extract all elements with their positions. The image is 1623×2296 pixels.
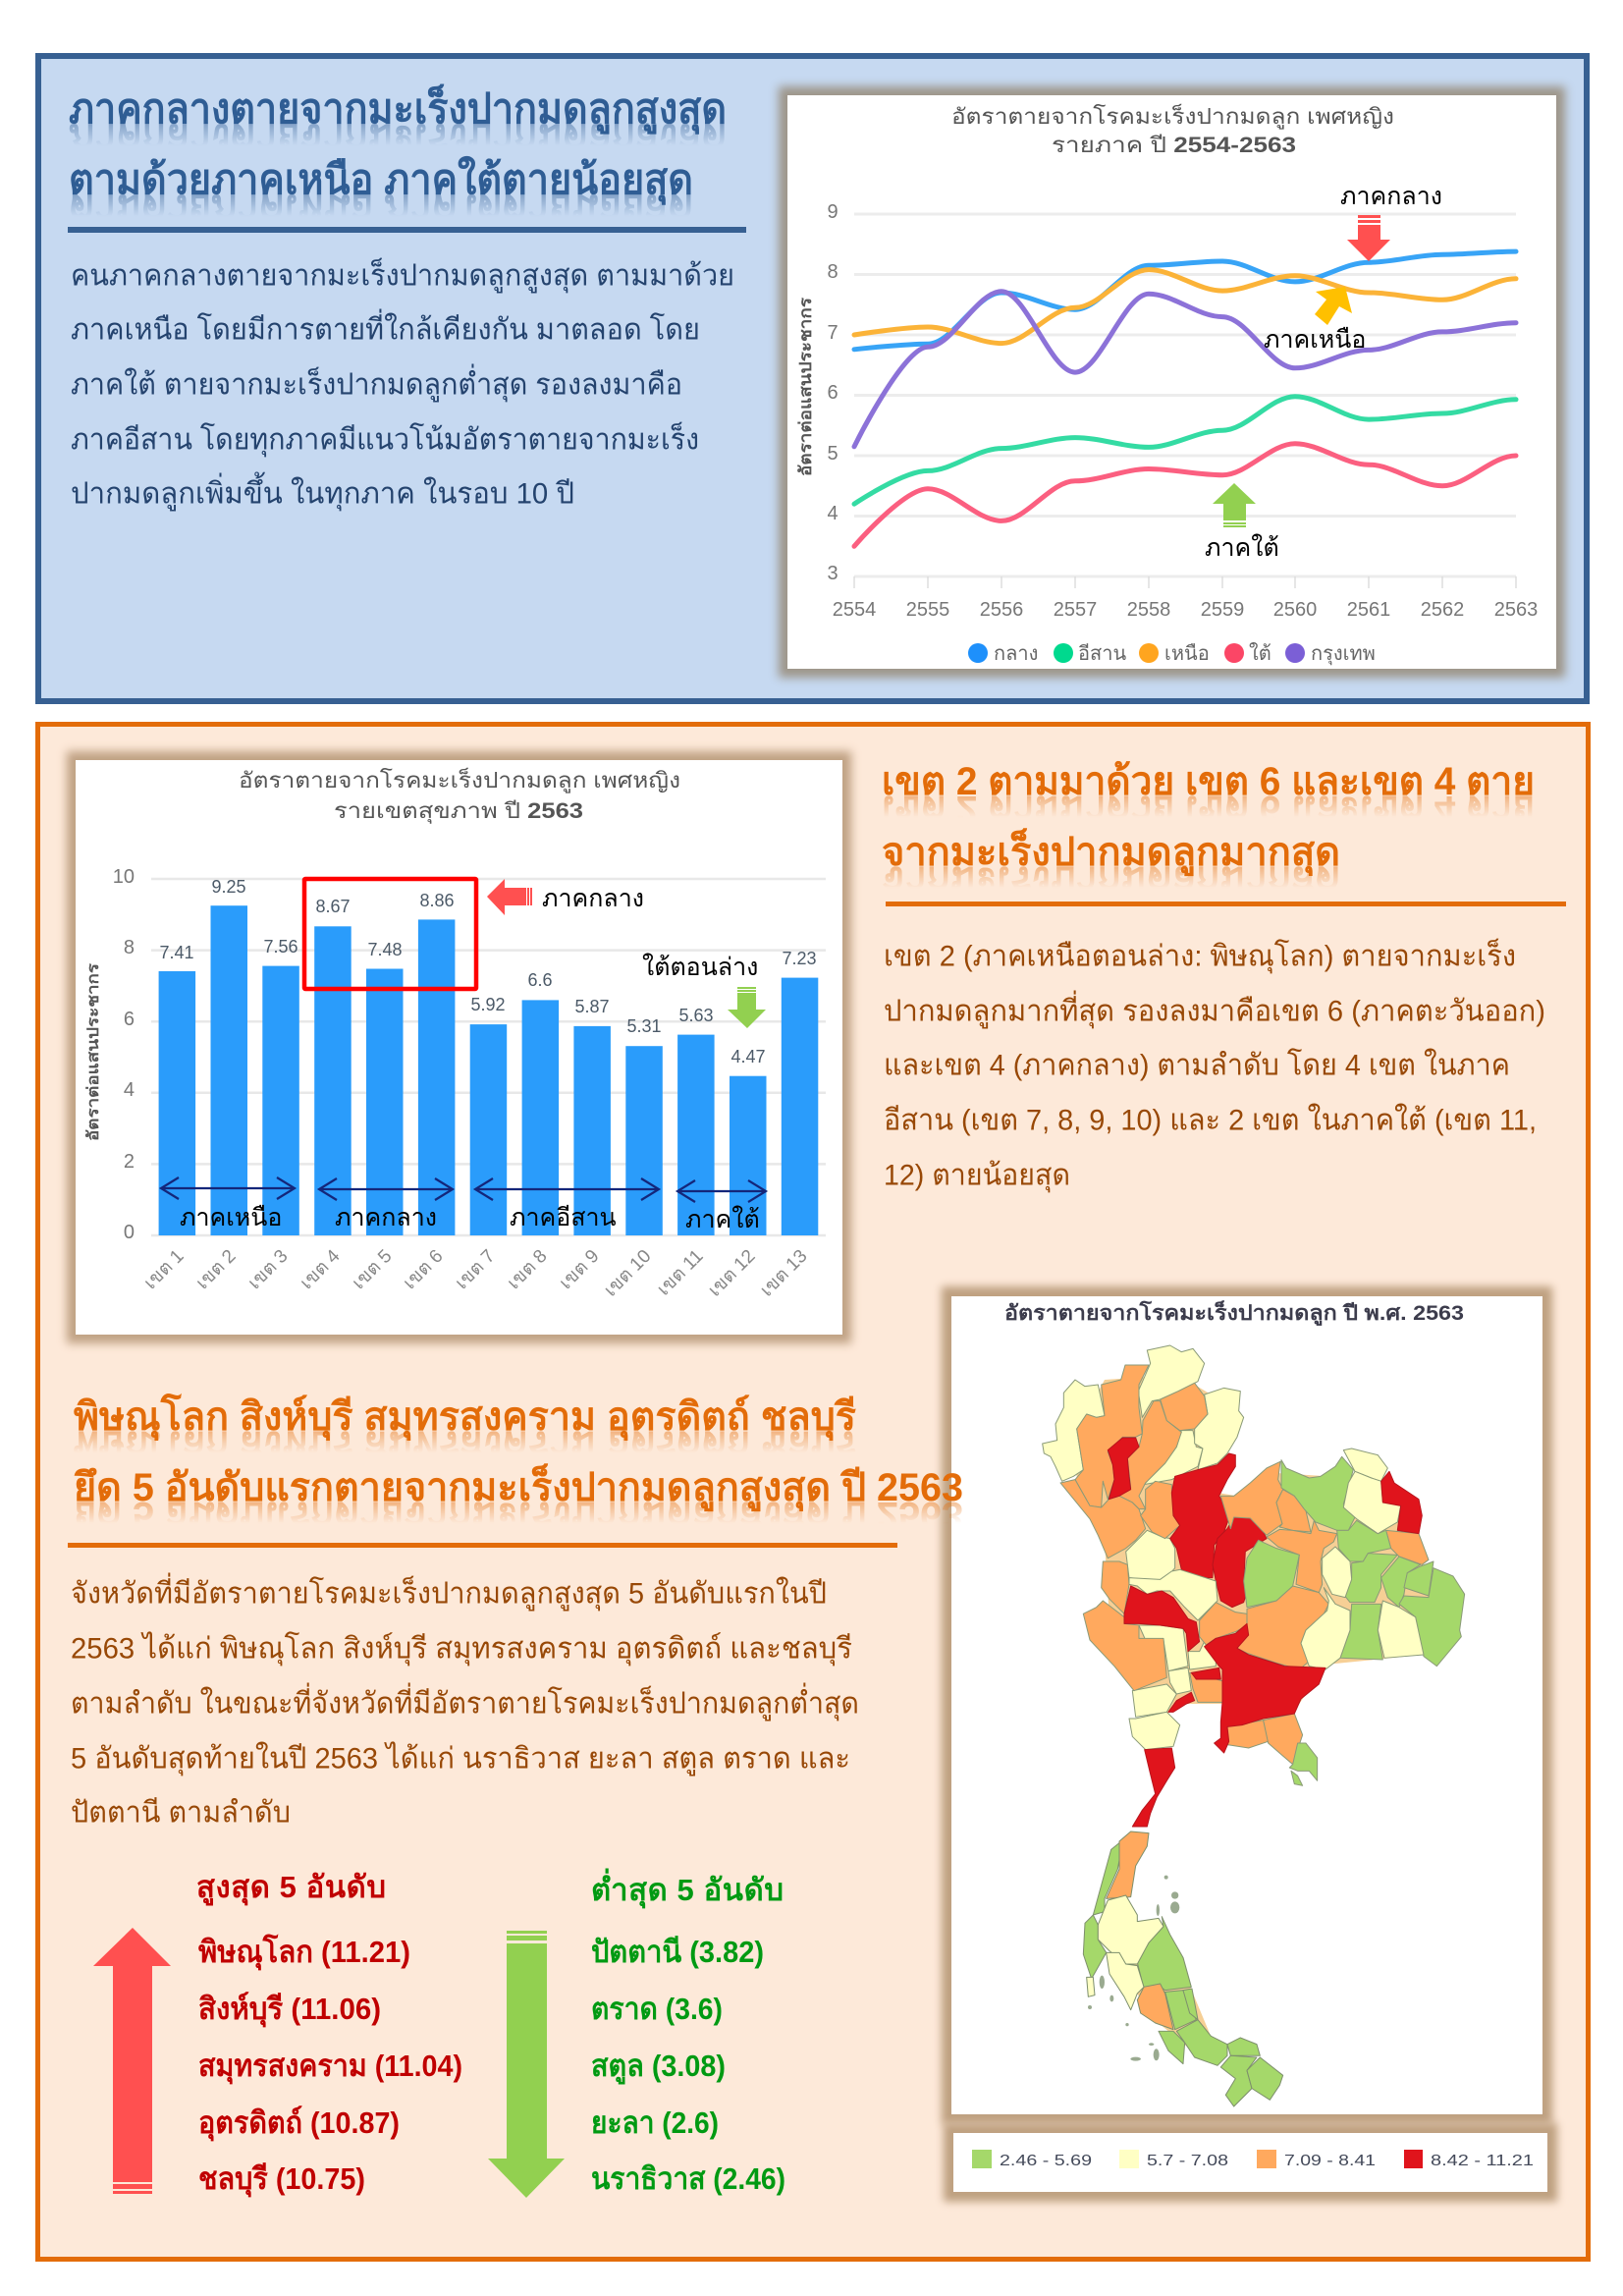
annotation: central region <box>1340 183 1442 261</box>
region arrow: south <box>677 1180 766 1233</box>
data labels: 6.6 <box>527 970 553 990</box>
legend: อีสาน <box>1078 643 1126 665</box>
x axis labels: 2560 <box>1273 599 1317 621</box>
heading rule: blue <box>68 227 746 233</box>
annotation: lower south: ใต้ตอนล่าง <box>642 953 758 981</box>
x axis labels: 2555 <box>906 599 949 621</box>
map legend: 8.42 - 11.21 <box>1431 2153 1534 2169</box>
x axis labels: เขต 6 <box>400 1246 448 1293</box>
card: map legend background <box>953 2133 1547 2192</box>
map legend: 2.46 - 5.69 <box>1000 2153 1092 2169</box>
y axis labels <box>827 201 839 584</box>
map provinces: central red cluster <box>1124 1586 1325 1827</box>
icon: green down arrow <box>488 1931 565 2198</box>
data labels: 9.25 <box>211 877 246 897</box>
map backing: closes gaps between provinces <box>1070 1375 1453 2052</box>
x axis labels: 2562 <box>1421 599 1464 621</box>
text block: national trend description: ภาคใต้ ตายจากมะเร็งปากมดลูกต่ำสุด รองลงมาคือ <box>71 363 682 403</box>
list: lowest five provinces: ตราด (3.6) <box>591 1992 723 2026</box>
legend: เหนือ <box>1164 643 1210 665</box>
x axis labels <box>833 599 1538 621</box>
x axis labels: 2554 <box>833 599 876 621</box>
text block: health region description: และเขต 4 (ภาคกลาง) ตามลำดับ โดย 4 เขต ในภาค <box>884 1047 1510 1082</box>
text block: national trend description: ภาคเหนือ โดยมีการตายที่ใกล้เคียงกัน มาตลอด โดย <box>71 308 700 346</box>
annotation: central region <box>487 879 644 915</box>
y axis labels <box>113 866 135 1243</box>
data labels: 7.48 <box>367 940 403 959</box>
list: lowest five provinces: ยะลา (2.6) <box>591 2105 719 2140</box>
data labels: 7.56 <box>263 937 298 957</box>
region arrow: north: ภาคเหนือ <box>180 1204 282 1231</box>
annotation: lower south <box>642 953 766 1028</box>
y axis labels: 8 <box>124 937 135 958</box>
x axis labels: เขต 13 <box>757 1246 812 1301</box>
annotation: north region: ภาคเหนือ <box>1264 326 1366 354</box>
text block: province description: 2563 ได้แก่ พิษณุโลก สิงห์บุรี สมุทรสงคราม อุตรดิตถ์ และชลบุรี <box>71 1630 852 1667</box>
legend: กรุงเทพ <box>1311 643 1376 666</box>
text block: province description: ตามลำดับ ในขณะที่จังหวัดที่มีอัตราตายโรคมะเร็งปากมดลูกต่ำสุด <box>71 1683 859 1722</box>
x axis labels: เขต 1 <box>140 1246 189 1293</box>
map: death rate by province 2563 <box>1004 1299 1465 2106</box>
bars <box>159 905 818 1235</box>
x axis labels: เขต 5 <box>349 1246 397 1293</box>
region arrow: central: ภาคกลาง <box>335 1204 437 1231</box>
y axis title: อัตราต่อแสนประชากร <box>84 963 102 1141</box>
list: lowest five provinces: ต่ำสุด 5 อันดับ <box>591 1868 784 1909</box>
chart title <box>951 102 1394 157</box>
x axis labels: เขต 10 <box>601 1246 656 1301</box>
x axis labels: เขต 7 <box>452 1246 500 1293</box>
list: highest five provinces: ชลบุรี (10.75) <box>198 2161 365 2198</box>
x axis labels: เขต 8 <box>504 1246 552 1293</box>
data labels: 5.63 <box>678 1006 714 1025</box>
panel: central region trend <box>35 53 1590 704</box>
text block: health region description: เขต 2 (ภาคเหนือตอนล่าง: พิษณุโลก) ตายจากมะเร็ง <box>884 937 1516 974</box>
bar chart: death rate by health region 2563 <box>84 766 826 1301</box>
list: lowest five provinces: สตูล (3.08) <box>591 2049 726 2085</box>
list: highest five provinces: สูงสุด 5 อันดับ <box>196 1870 386 1906</box>
text block: national trend description: คนภาคกลางตายจากมะเร็งปากมดลูกสูงสุด ตามมาด้วย <box>71 257 734 295</box>
x axis labels: เขต 3 <box>244 1246 293 1293</box>
text block: province description: จังหวัดที่มีอัตราตายโรคมะเร็งปากมดลูกสูงสุด 5 อันดับแรกในปี <box>71 1573 827 1613</box>
list: lowest five provinces: ปัตตานี (3.82) <box>591 1935 764 1969</box>
panel: health regions and provinces <box>35 722 1591 2262</box>
list: highest five provinces: อุตรดิตถ์ (10.87) <box>198 2105 400 2142</box>
data labels: 7.41 <box>159 943 194 962</box>
heading: central highest line two: ตามด้วยภาคเหนือ ภาคใต้ตายน้อยสุด <box>69 155 693 205</box>
map provinces: centre <box>1083 1561 1318 1785</box>
data labels: 7.23 <box>782 949 817 968</box>
x axis labels: 2556 <box>980 599 1023 621</box>
card: map background <box>951 1296 1542 2114</box>
heading: central highest line one: ภาคกลางตายจากมะเร็งปากมดลูกสูงสุด <box>69 83 727 135</box>
y axis labels: 2 <box>124 1151 135 1173</box>
annotation: south region <box>1205 483 1279 562</box>
text block: health region description <box>884 937 1545 1194</box>
region arrow: central <box>319 1178 453 1231</box>
legend <box>968 642 1376 666</box>
data labels: 5.87 <box>574 997 610 1016</box>
x axis labels <box>140 1245 812 1301</box>
text block: national trend description: ภาคอีสาน โดยทุกภาคมีแนวโน้มอัตราตายจากมะเร็ง <box>71 420 699 458</box>
list: lowest five provinces <box>591 1868 785 2196</box>
annotation: north region <box>1264 287 1366 354</box>
text block: national trend description <box>71 257 734 513</box>
x axis labels: เขต 12 <box>705 1246 760 1301</box>
x axis labels: เขต 2 <box>192 1246 241 1293</box>
data labels: 4.47 <box>730 1047 766 1066</box>
legend: กลาง <box>994 643 1038 665</box>
heading rule: orange lower <box>68 1543 897 1548</box>
data labels: 8.67 <box>315 897 351 916</box>
data labels <box>159 877 817 1066</box>
legend: ใต้ <box>1249 642 1271 665</box>
map provinces: south <box>1083 1831 1283 2106</box>
map title: อัตราตายจากโรคมะเร็งปากมดลูก ปี พ.ศ. 2563 <box>1004 1299 1464 1327</box>
x axis labels: เขต 11 <box>654 1246 708 1300</box>
text block: province description <box>71 1573 859 1829</box>
data labels: 5.92 <box>470 995 506 1014</box>
list: highest five provinces: สมุทรสงคราม (11.04) <box>198 2049 462 2085</box>
text block: province description: 5 อันดับสุดท้ายในปี 2563 ได้แก่ นราธิวาส ยะลา สตูล ตราด และ <box>71 1740 850 1777</box>
region arrow: northeast <box>475 1178 659 1231</box>
heading: health regions line one: เขต 2 ตามมาด้วย เขต 6 และเขต 4 ตาย <box>882 760 1535 803</box>
text block: province description: ปัตตานี ตามลำดับ <box>71 1797 291 1829</box>
y axis labels: 9 <box>827 201 839 223</box>
list: highest five provinces: สิงห์บุรี (11.06) <box>198 1992 381 2028</box>
list: highest five provinces <box>196 1870 462 2198</box>
chart title <box>239 766 680 824</box>
heading rule: orange top <box>886 902 1566 906</box>
chart title: รายเขตสุขภาพ ปี 2563 <box>334 798 583 824</box>
text block: national trend description: ปากมดลูกเพิ่มขึ้น ในทุกภาค ในรอบ 10 ปี <box>71 471 574 513</box>
x axis labels: เขต 9 <box>556 1246 604 1293</box>
x axis labels: 2559 <box>1201 599 1244 621</box>
annotation: central region: ภาคกลาง <box>542 885 644 912</box>
region arrow: northeast: ภาคอีสาน <box>510 1204 617 1231</box>
x axis labels: 2563 <box>1494 599 1538 621</box>
y axis title: อัตราต่อแสนประชากร <box>796 297 815 476</box>
y axis labels: 8 <box>827 261 839 283</box>
region arrow: south: ภาคใต้ <box>685 1205 760 1233</box>
chart title: รายภาค ปี 2554-2563 <box>1052 133 1296 157</box>
series lines <box>854 251 1516 546</box>
y axis labels: 4 <box>827 503 839 524</box>
map legend <box>972 2150 1534 2169</box>
text block: health region description: อีสาน (เขต 7, 8, 9, 10) และ 2 เขต ในภาคใต้ (เขต 11, <box>884 1104 1537 1137</box>
y axis labels: 6 <box>827 382 839 404</box>
map provinces: north <box>1043 1345 1267 1608</box>
card: bar chart background <box>76 760 842 1335</box>
x axis labels: 2558 <box>1127 599 1170 621</box>
map legend: 7.09 - 8.41 <box>1284 2153 1376 2169</box>
line chart: death rate by region 2554-2563 <box>796 102 1538 666</box>
annotation: south region: ภาคใต้ <box>1205 533 1279 562</box>
x axis labels: 2561 <box>1347 599 1390 621</box>
x axis labels: 2557 <box>1054 599 1097 621</box>
data labels: 5.31 <box>626 1016 662 1036</box>
x axis labels: เขต 4 <box>297 1245 345 1293</box>
heading: provinces line one: พิษณุโลก สิงห์บุรี สมุทรสงคราม อุตรดิตถ์ ชลบุรี <box>74 1394 857 1442</box>
icon: red up arrow <box>93 1928 171 2194</box>
text block: health region description: 12) ตายน้อยสุด <box>884 1159 1070 1194</box>
y axis labels: 7 <box>827 322 839 344</box>
heading: provinces line two: ยึด 5 อันดับแรกตายจากมะเร็งปากมดลูกสูงสุด ปี 2563 <box>74 1462 963 1512</box>
heading: health regions line two: จากมะเร็งปากมดลูกมากสุด <box>882 827 1340 877</box>
list: highest five provinces: พิษณุโลก (11.21) <box>198 1934 410 1971</box>
y axis labels: 0 <box>124 1222 135 1243</box>
map provinces: northeast <box>1220 1449 1465 1669</box>
data labels: 8.86 <box>419 891 455 910</box>
text block: health region description: ปากมดลูกมากที่สุด รองลงมาคือเขต 6 (ภาคตะวันออก) <box>884 990 1545 1029</box>
y axis labels: 4 <box>124 1079 135 1101</box>
highlight box: central region <box>304 879 476 989</box>
card: line chart background <box>787 95 1556 669</box>
y axis labels: 6 <box>124 1009 135 1030</box>
list: lowest five provinces: นราธิวาส (2.46) <box>591 2161 785 2196</box>
chart title: อัตราตายจากโรคมะเร็งปากมดลูก เพศหญิง <box>951 102 1394 130</box>
y axis labels: 10 <box>113 866 135 888</box>
annotation: central region: ภาคกลาง <box>1340 183 1442 210</box>
region arrow: north <box>161 1177 295 1231</box>
chart title: อัตราตายจากโรคมะเร็งปากมดลูก เพศหญิง <box>239 766 680 793</box>
map legend: 5.7 - 7.08 <box>1147 2153 1228 2169</box>
y axis labels: 3 <box>827 563 839 584</box>
y axis labels: 5 <box>827 443 839 465</box>
